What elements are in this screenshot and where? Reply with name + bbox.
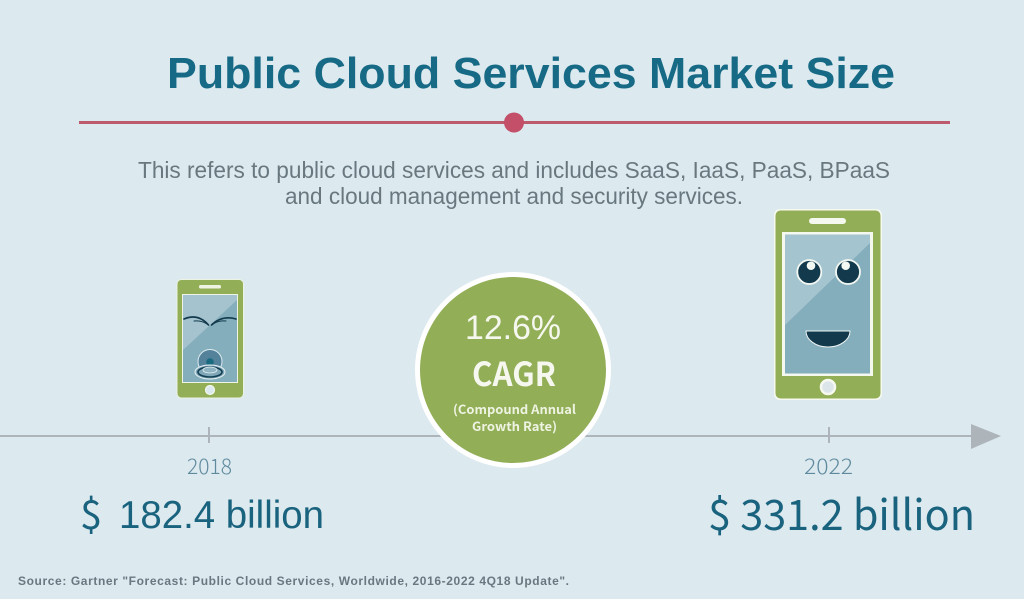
2018 label: 2018 (187, 451, 232, 481)
description text: This refers to public cloud services and includes SaaS, IaaS, PaaS, BPaaS (138, 157, 890, 183)
2018 value: $ (80, 483, 102, 541)
2018 value (80, 483, 324, 541)
2022 label: 2022 (804, 451, 853, 481)
icon: small phone, baby face (176, 279, 244, 398)
description text (138, 157, 890, 209)
sleeping eyes (184, 317, 236, 325)
2018 value: 182.4 billion (119, 494, 324, 537)
source note: Source: Gartner "Forecast: Public Cloud Services, Worldwide, 2016-2022 4Q18 Update". (18, 574, 569, 588)
description text: and cloud management and security services. (285, 183, 743, 209)
CAGR badge: (Compound Annual (453, 399, 576, 418)
title: Public Cloud Services Market Size (167, 49, 895, 98)
CAGR badge: 12.6% (465, 309, 561, 347)
title divider with dot (79, 112, 950, 132)
smile (806, 331, 850, 347)
2022 value: $ 331.2 billion (708, 482, 975, 543)
eyes (797, 260, 860, 284)
timeline arrow (0, 424, 1001, 449)
icon: large phone, smiling face (774, 209, 882, 400)
pacifier (195, 350, 225, 379)
CAGR badge: CAGR (472, 348, 556, 396)
CAGR badge (415, 272, 611, 468)
CAGR badge: Growth Rate) (472, 416, 557, 435)
